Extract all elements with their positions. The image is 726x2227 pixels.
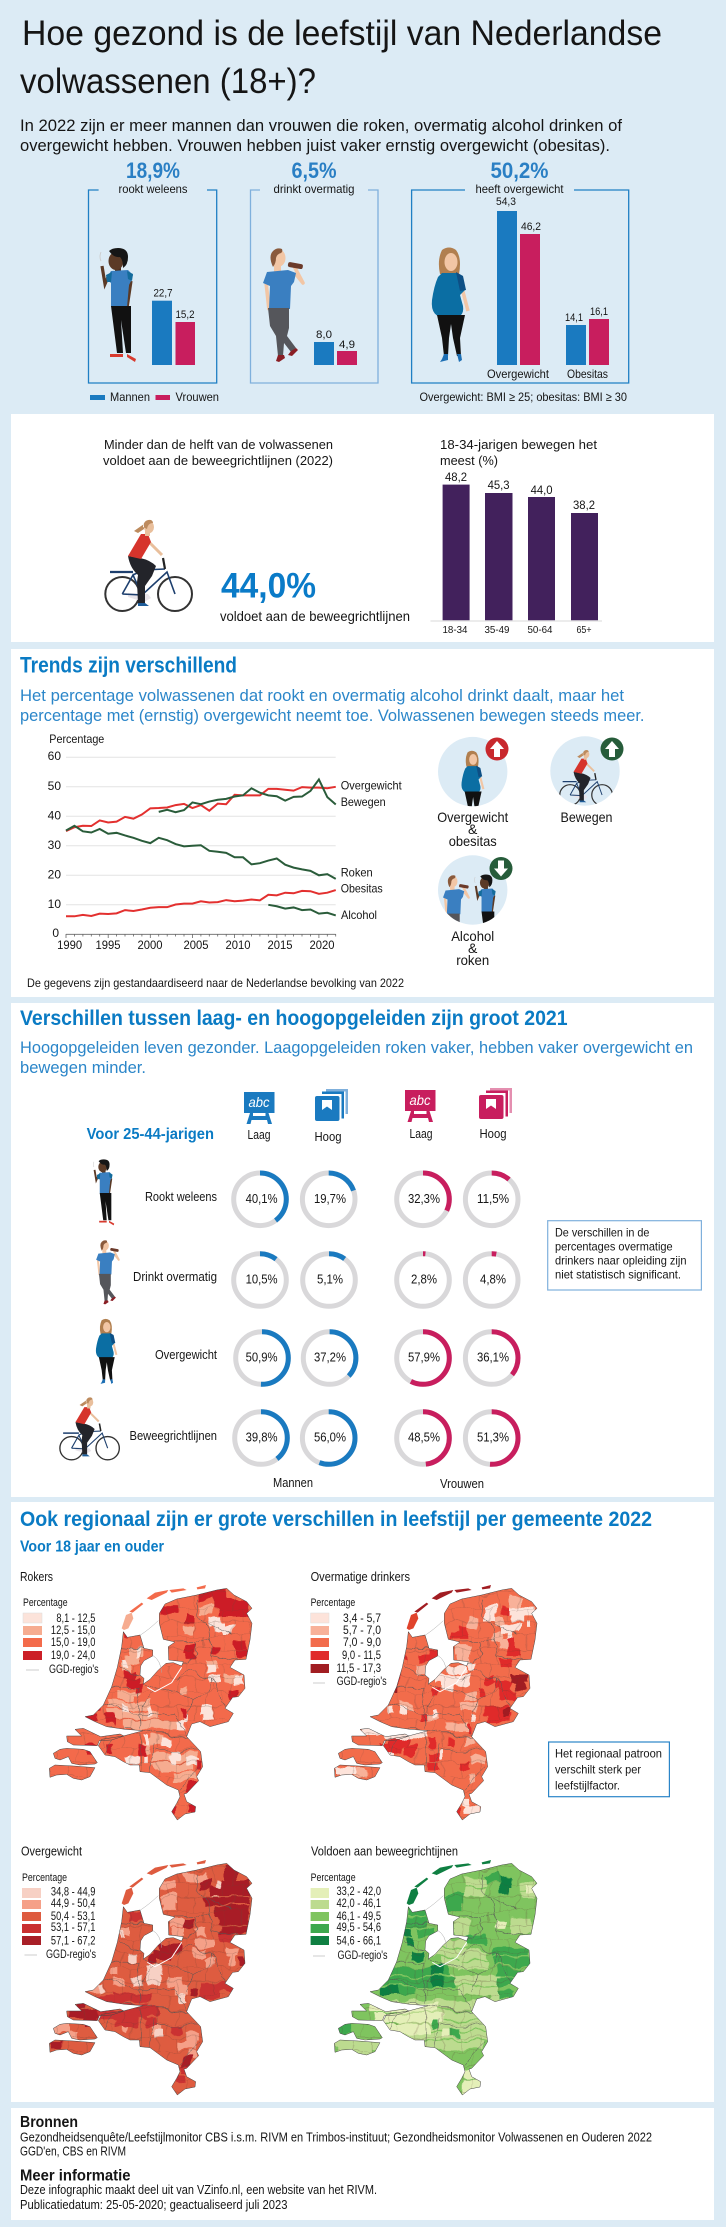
heading: trends: Trends zijn verschillend [20, 652, 237, 678]
text: meer informatie: Deze infographic maakt deel uit van VZinfo.nl, een website van het RIVM. [20, 2183, 377, 2197]
label: alcohol en roken: & [468, 940, 478, 956]
row: beweegrichtlijnen: 51,3% [477, 1431, 509, 1445]
row: beweegrichtlijnen: 48,5% [408, 1431, 440, 1445]
label: overgewicht en obesitas: & [468, 821, 478, 837]
map: overgewicht: 53,1 - 57,1 [51, 1922, 95, 1934]
labels: laag en hoog: Laag [248, 1127, 270, 1142]
stat: 44,0%: 44,0% [221, 566, 316, 606]
row: overgewicht: 37,2% [314, 1351, 346, 1365]
bar chart: leeftijd: 18-34 [442, 624, 468, 636]
line chart: trends 1990-2022: 50 [48, 779, 61, 793]
panel: trends [11, 649, 714, 997]
bars: overgewicht en obesitas: Overgewicht [487, 367, 550, 381]
legend: mannen en vrouwen: Mannen [110, 390, 150, 404]
labels: laag en hoog: Hoog [314, 1129, 342, 1144]
label: overgewicht en obesitas [437, 809, 508, 849]
callout: regionaal patroon: verschilt sterk per [555, 1763, 641, 1777]
map: overmatige drinkers: Overmatige drinkers [311, 1569, 410, 1584]
label: alcohol en roken [451, 928, 494, 968]
line chart: trends 1990-2022: 2015 [268, 938, 293, 952]
subheading: trends: Het percentage volwassenen dat rookt en overmatig alcohol drinkt daalt, maar het [20, 686, 624, 705]
labels: mannen en vrouwen: Vrouwen [440, 1476, 484, 1491]
row: rookt weleens: 19,7% [314, 1192, 346, 1206]
title: volwassenen (18+)? [20, 62, 316, 101]
map: overmatige drinkers: 3,4 - 5,7 [343, 1613, 381, 1625]
row: beweegrichtlijnen: 39,8% [246, 1431, 278, 1445]
map: overgewicht: 34,8 - 44,9 [51, 1887, 95, 1899]
line chart: trends 1990-2022: 2020 [310, 938, 335, 952]
bars: alcohol: 4,9 [339, 339, 355, 351]
label: drinkt overmatig: drinkt overmatig [274, 182, 354, 196]
legend: mannen en vrouwen [90, 390, 219, 404]
callout: statistisch niet significant: percentages overmatige [555, 1240, 673, 1254]
bar chart: leeftijd: 38,2 [573, 500, 595, 512]
bars: alcohol: 8,0 [316, 329, 332, 341]
subheading: trends [20, 686, 644, 725]
map: rokers: Percentage [23, 1597, 68, 1609]
map: overmatige drinkers: 5,7 - 7,0 [343, 1625, 381, 1637]
map: overgewicht: 50,4 - 53,1 [51, 1911, 95, 1923]
line chart: trends 1990-2022: 2005 [184, 938, 209, 952]
heading: 18-34-jarigen: meest (%) [440, 453, 498, 468]
row: beweegrichtlijnen: 56,0% [314, 1431, 346, 1445]
icon: alcohol en roken daalt [438, 855, 512, 925]
row: rookt weleens: 40,1% [246, 1192, 278, 1206]
intro text [20, 117, 622, 155]
line chart: trends 1990-2022: Alcohol [341, 908, 377, 922]
bar chart: leeftijd [430, 472, 602, 636]
panel: heeft overgewicht [412, 158, 629, 383]
line chart: trends 1990-2022: Overgewicht [341, 778, 402, 792]
icon: hoog mannen [315, 1089, 348, 1121]
map: voldoen aan beweegrichtlijnen: Voldoen aan beweegrichtijnen [311, 1844, 458, 1859]
panel: bronnen en meer informatie [11, 2108, 714, 2220]
footnote: standaardisatie: De gegevens zijn gestandaardiseerd naar de Nederlandse bevolking van 2022 [27, 976, 404, 990]
bar chart: leeftijd: 35-49 [484, 624, 510, 636]
heading: meer informatie: Meer informatie [20, 2168, 131, 2185]
heading: regionaal: Ook regionaal zijn er grote verschillen in leefstijl per gemeente 2022 [20, 1508, 652, 1531]
bars: overgewicht en obesitas: 14,1 [565, 312, 583, 324]
map: voldoen aan beweegrichtlijnen: GGD-regio's [338, 1950, 388, 1962]
row: rookt weleens [93, 1159, 518, 1226]
icon: overgewicht en obesitas stijgt [438, 737, 508, 806]
map: rokers: 8,1 - 12,5 [56, 1613, 95, 1625]
map: voldoen aan beweegrichtlijnen: 33,2 - 42,0 [336, 1886, 381, 1898]
label: bewegen: Bewegen [560, 809, 612, 825]
label: rookt weleens: rookt weleens [118, 182, 188, 196]
label: alcohol en roken: Alcohol [451, 928, 494, 944]
row: rookt weleens: Rookt weleens [145, 1189, 217, 1204]
heading: voor 25-44-jarigen: Voor 25-44-jarigen [87, 1126, 214, 1143]
bars: overgewicht en obesitas [487, 196, 609, 381]
callout: statistisch niet significant: niet statistisch significant. [555, 1268, 681, 1282]
icon: laag vrouwen [405, 1090, 436, 1122]
line chart: trends 1990-2022: 20 [48, 868, 61, 882]
map: overgewicht: GGD-regio's [46, 1949, 96, 1961]
stat: 18,9%: 18,9% [126, 158, 180, 183]
callout: regionaal patroon [549, 1742, 669, 1797]
icon: bewegen stijgt [550, 736, 624, 806]
title: Hoe gezond is de leefstijl van Nederlandse [22, 14, 662, 53]
panel: rookt weleens [88, 158, 217, 383]
labels: mannen en vrouwen [273, 1475, 484, 1491]
heading: 18-34-jarigen: 18-34-jarigen bewegen het [440, 437, 597, 452]
bars: overgewicht en obesitas: 46,2 [521, 221, 541, 233]
map: rokers: Rokers [20, 1569, 53, 1584]
map: overgewicht [22, 1846, 252, 2096]
row: overgewicht [96, 1319, 518, 1384]
icon: drinker [263, 248, 303, 362]
row: drinkt overmatig: 2,8% [411, 1273, 437, 1287]
text: bronnen: Gezondheidsenquête/Leefstijlmonitor CBS i.s.m. RIVM en Trimbos-instituut; Gezondheidsmonitor Volwassenen en Ouderen 2022 [20, 2131, 652, 2145]
label: alcohol en roken: roken [456, 952, 489, 968]
map: overmatige drinkers: Percentage [311, 1597, 355, 1609]
label: overgewicht en obesitas: Overgewicht [437, 809, 508, 825]
map: rokers: 12,5 - 15,0 [51, 1625, 95, 1637]
callout: statistisch niet significant: drinkers naar opleiding zijn [555, 1254, 686, 1268]
bar chart: leeftijd: 50-64 [528, 624, 553, 636]
map: rokers: 19,0 - 24,0 [51, 1650, 95, 1662]
row: overgewicht: 57,9% [408, 1351, 440, 1365]
bar chart: leeftijd: 45,3 [488, 480, 510, 492]
intro text: In 2022 zijn er meer mannen dan vrouwen die roken, overmatig alcohol drinken of [20, 117, 622, 135]
callout: statistisch niet significant: De verschillen in de [555, 1226, 650, 1240]
subheading: opleiding [20, 1038, 693, 1077]
line chart: trends 1990-2022: 1990 [57, 938, 82, 952]
line chart: trends 1990-2022 [48, 732, 402, 952]
text: meer informatie [20, 2183, 377, 2212]
row: drinkt overmatig: 5,1% [317, 1273, 343, 1287]
map: overmatige drinkers: 7,0 - 9,0 [343, 1637, 381, 1649]
row: drinkt overmatig: 4,8% [480, 1273, 506, 1287]
bars: roken: 22,7 [154, 288, 172, 300]
map: overmatige drinkers: 11,5 - 17,3 [336, 1663, 381, 1675]
line chart: trends 1990-2022: 30 [48, 838, 61, 852]
panel: regionaal [11, 1502, 714, 2105]
callout: regionaal patroon: leefstijlfactor. [555, 1779, 620, 1793]
map: voldoen aan beweegrichtlijnen: Percentage [311, 1872, 356, 1884]
line chart: trends 1990-2022: Roken [341, 866, 373, 880]
subheading: trends: percentage met (ernstig) overgewicht neemt toe. Volwassenen bewegen steeds meer. [20, 706, 644, 725]
row: drinkt overmatig: Drinkt overmatig [133, 1269, 217, 1284]
row: rookt weleens: 11,5% [477, 1192, 509, 1206]
text: bronnen: GGD'en, CBS en RIVM [20, 2145, 126, 2159]
line chart: trends 1990-2022: 60 [48, 749, 61, 763]
map: overmatige drinkers: GGD-regio's [337, 1676, 387, 1688]
icon: hoog vrouwen [479, 1088, 512, 1119]
row: beweegrichtlijnen [60, 1397, 518, 1464]
row: overgewicht: 50,9% [246, 1351, 278, 1365]
row: drinkt overmatig [96, 1240, 518, 1306]
line chart: trends 1990-2022: Bewegen [341, 795, 386, 809]
map: overmatige drinkers [311, 1569, 552, 1830]
heading: 18-34-jarigen [440, 437, 597, 468]
bars: alcohol [314, 329, 357, 365]
map: overgewicht: 44,9 - 50,4 [51, 1898, 96, 1910]
callout: statistisch niet significant [548, 1221, 701, 1290]
panel: bewegen [11, 414, 714, 642]
map: voldoen aan beweegrichtlijnen: 42,0 - 46,1 [336, 1898, 381, 1910]
title [20, 14, 662, 101]
label: heeft overgewicht: heeft overgewicht [476, 182, 564, 196]
line chart: trends 1990-2022: 0 [52, 926, 59, 940]
line chart: trends 1990-2022: 40 [48, 808, 61, 822]
map: rokers [20, 1572, 252, 1820]
text: bronnen [20, 2131, 652, 2159]
line chart: trends 1990-2022: 10 [48, 897, 61, 911]
icon: fietser [105, 520, 192, 611]
intro text: overgewicht hebben. Vrouwen hebben juist vaker ernstig overgewicht (obesitas). [20, 137, 610, 155]
text: minder dan de helft: Minder dan de helft van de volwassenen [104, 437, 333, 452]
line chart: trends 1990-2022: 1995 [96, 938, 121, 952]
icon: vrouw met overgewicht [432, 248, 468, 362]
label: voldoet aan de beweegrichtlijnen: voldoet aan de beweegrichtlijnen [220, 608, 410, 624]
icon: laag mannen [244, 1092, 274, 1124]
row: overgewicht: Overgewicht [155, 1347, 217, 1362]
map: voldoen aan beweegrichtlijnen [310, 1846, 538, 2096]
text: minder dan de helft: voldoet aan de beweegrichtlijnen (2022) [103, 453, 333, 468]
row: beweegrichtlijnen: Beweegrichtlijnen [130, 1428, 217, 1443]
labels: laag en hoog: Laag [410, 1126, 432, 1141]
bar chart: leeftijd: 65+ [576, 624, 592, 636]
bars: roken: 15,2 [176, 309, 194, 321]
bar chart: leeftijd: 48,2 [445, 472, 467, 484]
text: minder dan de helft [103, 437, 333, 468]
panel: opleiding [11, 1003, 714, 1497]
map: voldoen aan beweegrichtlijnen: 49,5 - 54,6 [336, 1922, 381, 1934]
map: voldoen aan beweegrichtlijnen: 46,1 - 49,5 [336, 1911, 381, 1923]
line chart: trends 1990-2022: 2010 [226, 938, 251, 952]
stat: 6,5%: 6,5% [292, 158, 336, 183]
callout: regionaal patroon: Het regionaal patroon [555, 1747, 662, 1761]
subheading: opleiding: bewegen minder. [20, 1058, 146, 1077]
map: voldoen aan beweegrichtlijnen: 54,6 - 66,1 [336, 1936, 381, 1948]
subheading: voor 18 jaar en ouder: Voor 18 jaar en ouder [20, 1539, 164, 1556]
row: overgewicht: 36,1% [477, 1351, 509, 1365]
text: meer informatie: Publicatiedatum: 25-05-2020; geactualiseerd juli 2023 [20, 2198, 288, 2212]
map: rokers: GGD-regio's [49, 1664, 99, 1676]
map: overgewicht: Percentage [22, 1872, 67, 1884]
bars: roken [152, 288, 195, 365]
stat: 50,2%: 50,2% [490, 158, 548, 183]
map: overgewicht: 57,1 - 67,2 [51, 1936, 95, 1948]
labels: laag en hoog: Hoog [480, 1126, 506, 1141]
heading: opleiding: Verschillen tussen laag- en hoogopgeleiden zijn groot 2021 [20, 1007, 568, 1030]
row: drinkt overmatig: 10,5% [246, 1273, 278, 1287]
legend: mannen en vrouwen: Vrouwen [176, 390, 219, 404]
bars: overgewicht en obesitas: Obesitas [567, 367, 608, 381]
bars: overgewicht en obesitas: 54,3 [496, 196, 516, 208]
row: rookt weleens: 32,3% [408, 1192, 440, 1206]
bars: overgewicht en obesitas: 16,1 [590, 306, 608, 318]
line chart: trends 1990-2022: Obesitas [341, 882, 383, 896]
note: BMI: Overgewicht: BMI ≥ 25; obesitas: BMI ≥ 30 [420, 390, 627, 404]
bar chart: leeftijd: 44,0 [531, 485, 553, 497]
map: overmatige drinkers: 9,0 - 11,5 [342, 1650, 381, 1662]
map: rokers: 15,0 - 19,0 [51, 1637, 95, 1649]
label: overgewicht en obesitas: obesitas [449, 833, 497, 849]
line chart: trends 1990-2022: 2000 [138, 938, 163, 952]
heading: bronnen: Bronnen [20, 2114, 78, 2131]
subheading: opleiding: Hoogopgeleiden leven gezonder. Laagopgeleiden roken vaker, hebben vaker overgewicht en [20, 1038, 693, 1057]
line chart: trends 1990-2022: Percentage [49, 732, 105, 746]
labels: mannen en vrouwen: Mannen [273, 1475, 313, 1490]
icon: laag mannen: abc [248, 1094, 270, 1110]
icon: laag vrouwen: abc [410, 1092, 430, 1108]
icon: roker [100, 248, 136, 362]
labels: laag en hoog [248, 1126, 506, 1144]
panel: drinkt overmatig [250, 158, 378, 383]
map: overgewicht: Overgewicht [21, 1844, 82, 1859]
